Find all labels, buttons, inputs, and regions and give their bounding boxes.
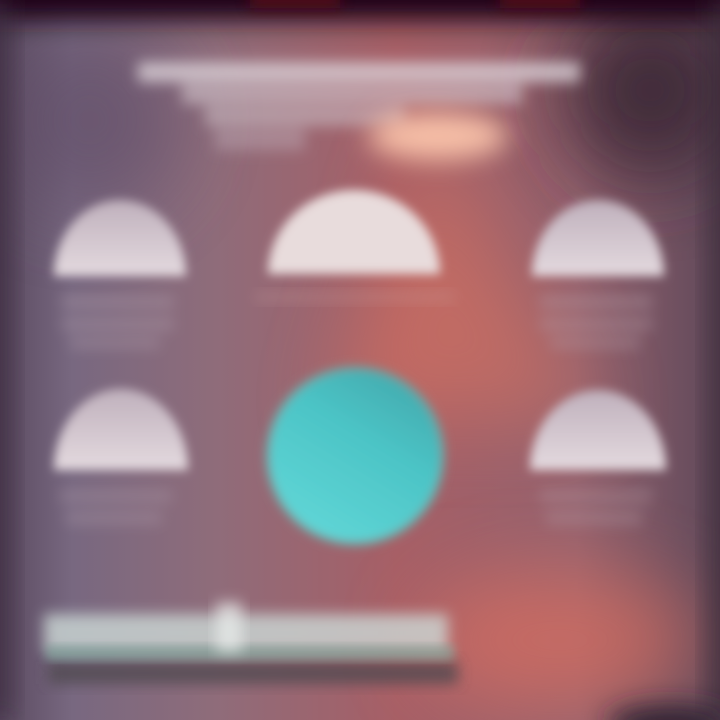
glow: sun behind title	[368, 112, 508, 160]
text block: top centre	[255, 292, 455, 302]
dome: bottom left	[54, 389, 188, 470]
text block: top left	[62, 296, 174, 348]
text block: top right	[540, 296, 652, 348]
teal circle	[267, 368, 443, 544]
title block	[138, 62, 580, 150]
dome: top right	[532, 200, 664, 276]
dome: bottom right	[530, 390, 666, 470]
text block: bottom right	[540, 490, 652, 524]
text block: bottom left	[60, 490, 172, 524]
dome: top left	[54, 200, 186, 276]
dome: top centre	[268, 190, 440, 274]
footer banner	[44, 602, 458, 684]
